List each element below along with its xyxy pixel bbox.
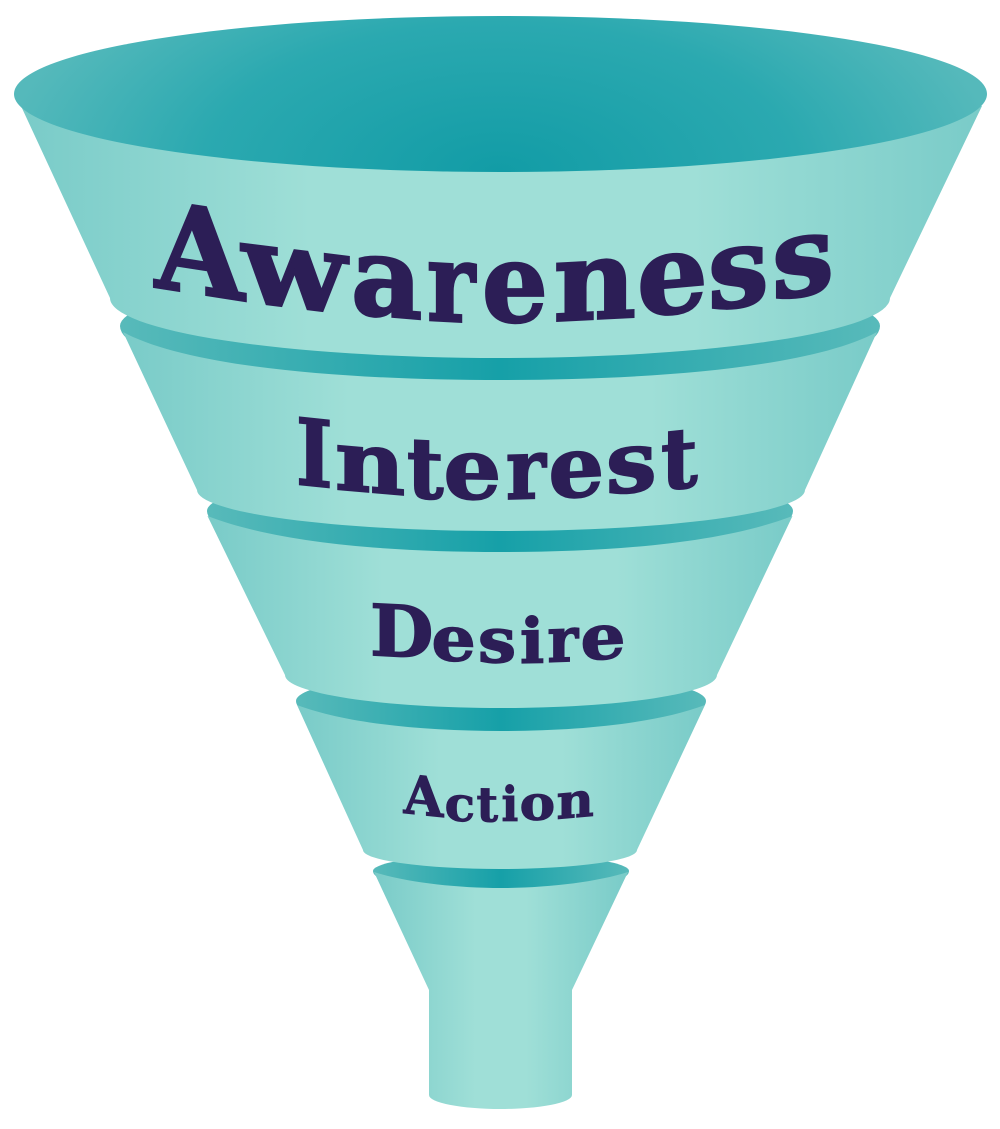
label: awareness: a bbox=[351, 210, 422, 345]
label: desire: i bbox=[520, 604, 544, 678]
label: awareness: w bbox=[240, 198, 349, 341]
label: interest: s bbox=[606, 411, 657, 514]
label: desire: s bbox=[478, 605, 516, 677]
label: awareness: r bbox=[427, 217, 477, 349]
label: awareness: n bbox=[554, 214, 636, 348]
rim: interest bbox=[120, 272, 880, 392]
label: desire: r bbox=[548, 603, 579, 677]
band: action bbox=[297, 705, 705, 869]
label: awareness: e bbox=[637, 208, 708, 343]
label: awareness: A bbox=[154, 174, 247, 330]
label: action: o bbox=[520, 774, 555, 831]
label: interest bbox=[296, 399, 698, 520]
label: awareness bbox=[154, 174, 834, 349]
rim: desire bbox=[207, 470, 793, 563]
label: awareness: s bbox=[772, 188, 834, 327]
label: action: c bbox=[445, 775, 475, 833]
label: awareness: e bbox=[482, 219, 548, 348]
label: desire: e bbox=[432, 602, 476, 676]
rim: spout opening bbox=[373, 854, 629, 895]
label: action bbox=[403, 763, 594, 834]
label: interest: I bbox=[296, 399, 333, 510]
spout body bbox=[374, 872, 628, 1109]
label: desire: e bbox=[580, 600, 625, 675]
label: interest: e bbox=[548, 417, 604, 519]
label: interest: n bbox=[335, 411, 405, 515]
funnel section: awareness bbox=[14, 16, 987, 358]
label: action: A bbox=[403, 763, 444, 831]
funnel mouth bbox=[14, 16, 987, 172]
label: desire bbox=[370, 589, 625, 678]
label: interest: r bbox=[506, 419, 547, 519]
band: awareness bbox=[21, 106, 982, 358]
label: action: t bbox=[476, 777, 498, 834]
funnel spout section bbox=[373, 854, 629, 1109]
funnel section: desire bbox=[207, 470, 793, 708]
label: awareness: s bbox=[708, 199, 769, 336]
label: interest: e bbox=[444, 419, 501, 519]
label: action: n bbox=[556, 770, 594, 831]
funnel section: interest bbox=[120, 272, 880, 531]
label: interest: t bbox=[407, 419, 444, 520]
rim: action bbox=[296, 671, 706, 739]
label: interest: t bbox=[661, 408, 698, 511]
label: desire: D bbox=[370, 589, 433, 676]
funnel section: action bbox=[296, 671, 706, 869]
band: desire bbox=[208, 516, 792, 708]
band: interest bbox=[123, 332, 877, 531]
label: action: i bbox=[502, 776, 518, 832]
